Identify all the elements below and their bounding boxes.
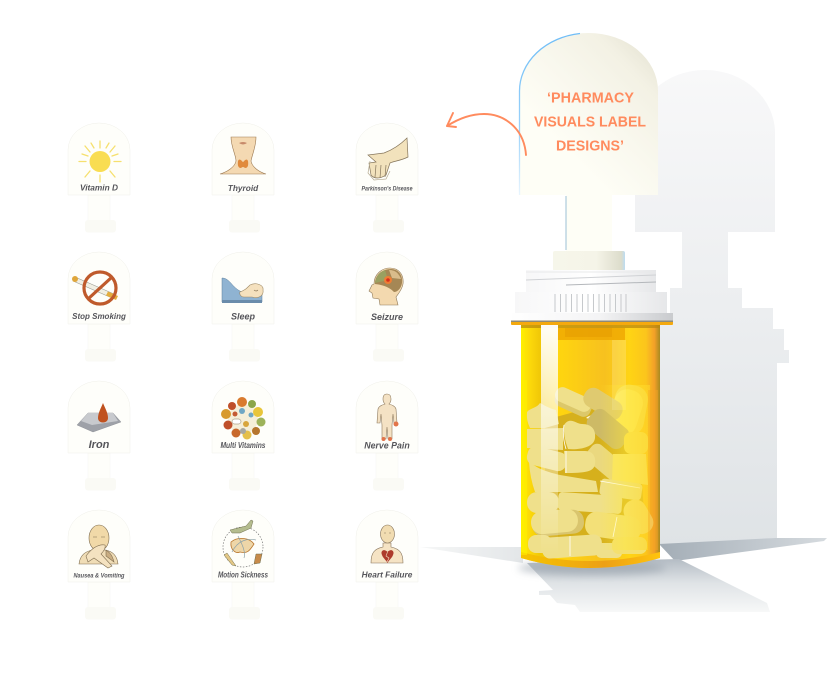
icon: no smoking bbox=[72, 272, 118, 304]
icon: neck and thyroid bbox=[220, 137, 266, 174]
heading bbox=[534, 90, 646, 154]
bottle neck bbox=[553, 251, 625, 271]
icon: sun bbox=[79, 141, 121, 182]
label: Iron: Iron bbox=[89, 439, 110, 451]
cap bbox=[509, 270, 673, 325]
label: Motion Sickness: Motion Sickness bbox=[218, 570, 269, 580]
label: Heart Failure bbox=[356, 510, 418, 620]
label: Iron bbox=[68, 381, 130, 490]
label: Sleep bbox=[212, 252, 274, 362]
label: Thyroid bbox=[212, 123, 274, 232]
pill bottle bbox=[509, 251, 673, 568]
label: Stop Smoking: Stop Smoking bbox=[72, 312, 126, 321]
label: Nausea & Vomiting: Nausea & Vomiting bbox=[74, 572, 125, 580]
icon: motion sickness bbox=[223, 520, 263, 567]
heading: DESIGNS’ bbox=[556, 138, 624, 154]
bottle body bbox=[521, 325, 660, 568]
label: Motion Sickness bbox=[212, 510, 274, 620]
icon: sleeping baby bbox=[222, 278, 263, 303]
icon: brain in head bbox=[369, 268, 403, 305]
label: Heart Failure: Heart Failure bbox=[362, 570, 413, 580]
heading: ‘PHARMACY bbox=[547, 90, 634, 106]
label: Nausea & Vomiting bbox=[68, 510, 130, 620]
label: Multi Vitamins: Multi Vitamins bbox=[220, 441, 266, 450]
label: Parkinson's Disease bbox=[356, 123, 418, 232]
label: Seizure bbox=[356, 252, 418, 362]
label: Thyroid: Thyroid bbox=[228, 183, 259, 193]
icon: iron bar and drop bbox=[77, 403, 121, 432]
icon: shaking hand bbox=[368, 138, 408, 180]
label: Multi Vitamins bbox=[212, 381, 274, 490]
label: Vitamin D: Vitamin D bbox=[80, 182, 118, 192]
label: Parkinson's Disease: Parkinson's Disease bbox=[362, 186, 413, 192]
label: Nerve Pain bbox=[356, 381, 418, 490]
label: Nerve Pain: Nerve Pain bbox=[364, 440, 410, 450]
bottle cast shadow bbox=[420, 70, 827, 612]
label: Vitamin D bbox=[68, 123, 130, 232]
bottle glare bbox=[521, 325, 658, 555]
icon: vitamin foods bbox=[221, 397, 266, 440]
label: Stop Smoking bbox=[68, 252, 130, 362]
pills bbox=[525, 382, 657, 559]
icon: nauseous man bbox=[79, 525, 118, 568]
icon: man with broken heart bbox=[371, 525, 403, 563]
label: Sleep: Sleep bbox=[231, 312, 256, 322]
label: Seizure: Seizure bbox=[371, 312, 403, 322]
arrow bbox=[447, 113, 526, 155]
heading: VISUALS LABEL bbox=[534, 114, 646, 130]
main label tag bbox=[519, 33, 658, 252]
icon: body with nerve pain bbox=[377, 394, 398, 441]
